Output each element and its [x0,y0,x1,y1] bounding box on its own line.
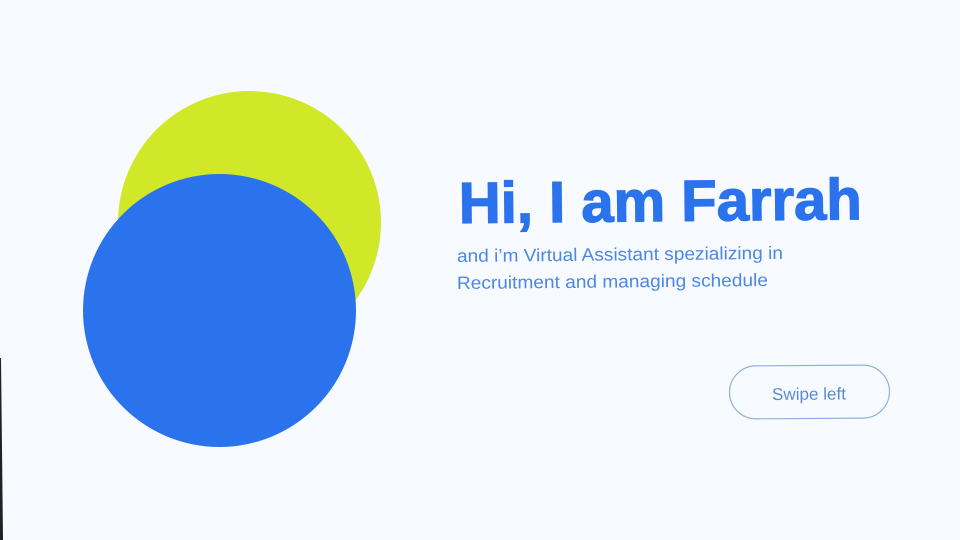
title: Hi, I am Farrah [459,167,862,236]
icon: overlapping circles [83,91,381,447]
button outline [729,365,890,419]
button label: Swipe left [772,384,846,404]
subtitle line 2: Recruitment and managing schedule [457,270,768,293]
subtitle text block [457,243,783,293]
swipe left button [729,365,890,419]
subtitle line 1: and i’m Virtual Assistant spezializing in [457,243,783,266]
blue circle [83,174,356,447]
lime circle [118,91,381,354]
